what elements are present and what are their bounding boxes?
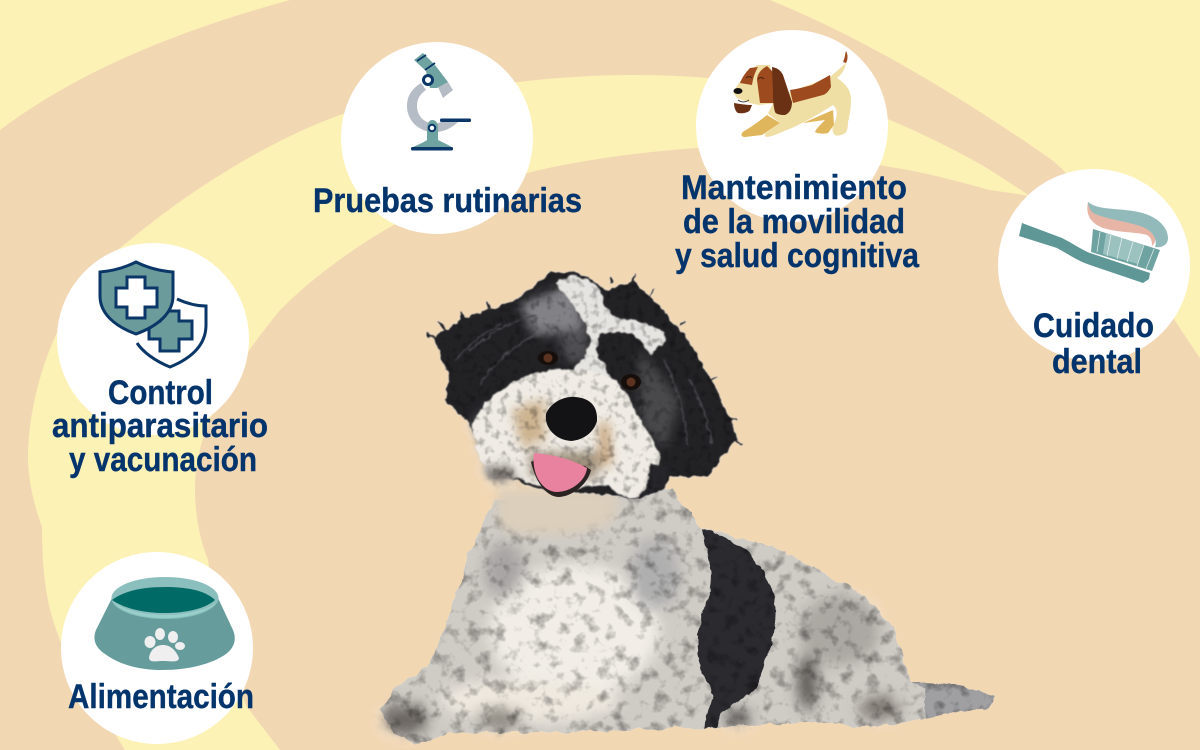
label: Mantenimiento de la movilidad y salud cognitiva: y salud cognitiva xyxy=(675,237,920,275)
icon: cartoon puppy xyxy=(733,51,851,137)
label: Mantenimiento de la movilidad y salud cognitiva xyxy=(675,169,920,275)
icon: pet bowl with paw xyxy=(94,577,235,670)
circle: food bowl item xyxy=(61,552,253,744)
circle: toothbrush item xyxy=(998,169,1190,361)
dog mouth xyxy=(531,458,591,497)
label: Cuidado dental: Cuidado xyxy=(1033,307,1154,345)
label: Cuidado dental: dental xyxy=(1052,343,1142,381)
dog head fur xyxy=(427,272,741,500)
photo-style illustration: fluffy black and white dog xyxy=(380,272,995,745)
dark fur below right cheek xyxy=(632,462,668,500)
black body patch xyxy=(698,528,776,727)
icon: shields with crosses xyxy=(100,262,206,367)
label: Control antiparasitario y vacunación: y vacunación xyxy=(69,441,257,479)
icon: microscope xyxy=(407,53,471,150)
dog neck fur xyxy=(497,488,617,534)
white head blaze xyxy=(555,276,667,380)
label: Control antiparasitario y vacunación xyxy=(52,374,268,479)
muzzle white fur xyxy=(473,369,660,498)
icon: toothbrush xyxy=(1019,202,1168,283)
label: Pruebas rutinarias: Pruebas rutinarias xyxy=(313,182,582,220)
label: Alimentación: Alimentación xyxy=(68,678,254,716)
grey hair strands xyxy=(470,282,680,478)
circle: shields item xyxy=(57,243,249,435)
dog tongue xyxy=(534,453,587,492)
icon: paw print xyxy=(144,628,185,661)
label: Mantenimiento de la movilidad y salud cognitiva: Mantenimiento xyxy=(681,169,907,207)
dog body, tail and paws xyxy=(380,490,995,745)
label: Mantenimiento de la movilidad y salud cognitiva: de la movilidad xyxy=(683,203,905,241)
label: Cuidado dental xyxy=(1033,307,1154,381)
dog nose xyxy=(546,397,597,441)
label: Control antiparasitario y vacunación: antiparasitario xyxy=(52,407,268,445)
dog eyes xyxy=(538,351,641,390)
circle: dog mobility item xyxy=(696,30,888,222)
circle: microscope item xyxy=(341,42,533,234)
label: Control antiparasitario y vacunación: Control xyxy=(108,374,213,412)
